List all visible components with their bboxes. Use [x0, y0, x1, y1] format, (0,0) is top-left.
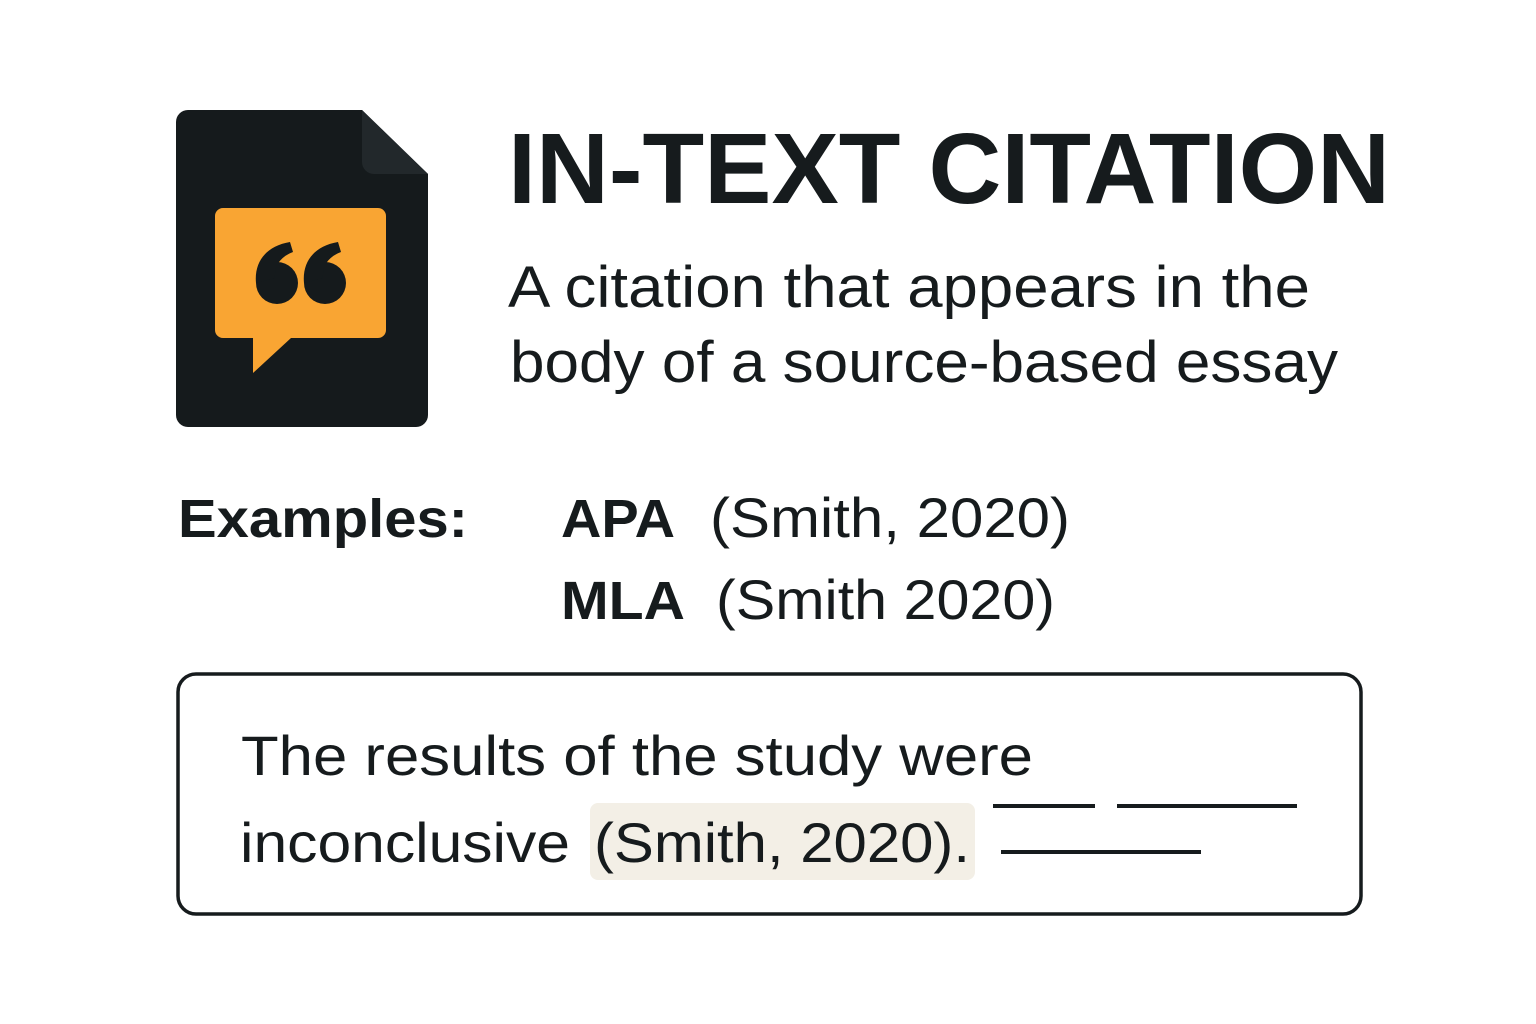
- examples: APA: [561, 489, 675, 549]
- examples: MLA: [561, 571, 685, 631]
- examples: (Smith, 2020): [710, 486, 1070, 549]
- title: IN-TEXT CITATION: [508, 113, 1390, 225]
- panel: example sentence: (Smith, 2020).: [594, 811, 970, 874]
- subtitle: [508, 255, 1338, 395]
- panel: example sentence: The results of the study were: [241, 724, 1033, 787]
- subtitle: A citation that appears in the: [508, 255, 1310, 320]
- examples: (Smith 2020): [716, 568, 1055, 631]
- subtitle: body of a source-based essay: [510, 330, 1338, 395]
- panel: example sentence: [178, 674, 1361, 914]
- icon: document with quote bubble: [176, 110, 428, 427]
- panel: example sentence: inconclusive: [240, 811, 570, 874]
- examples: [178, 486, 1070, 631]
- examples: Examples:: [178, 489, 468, 549]
